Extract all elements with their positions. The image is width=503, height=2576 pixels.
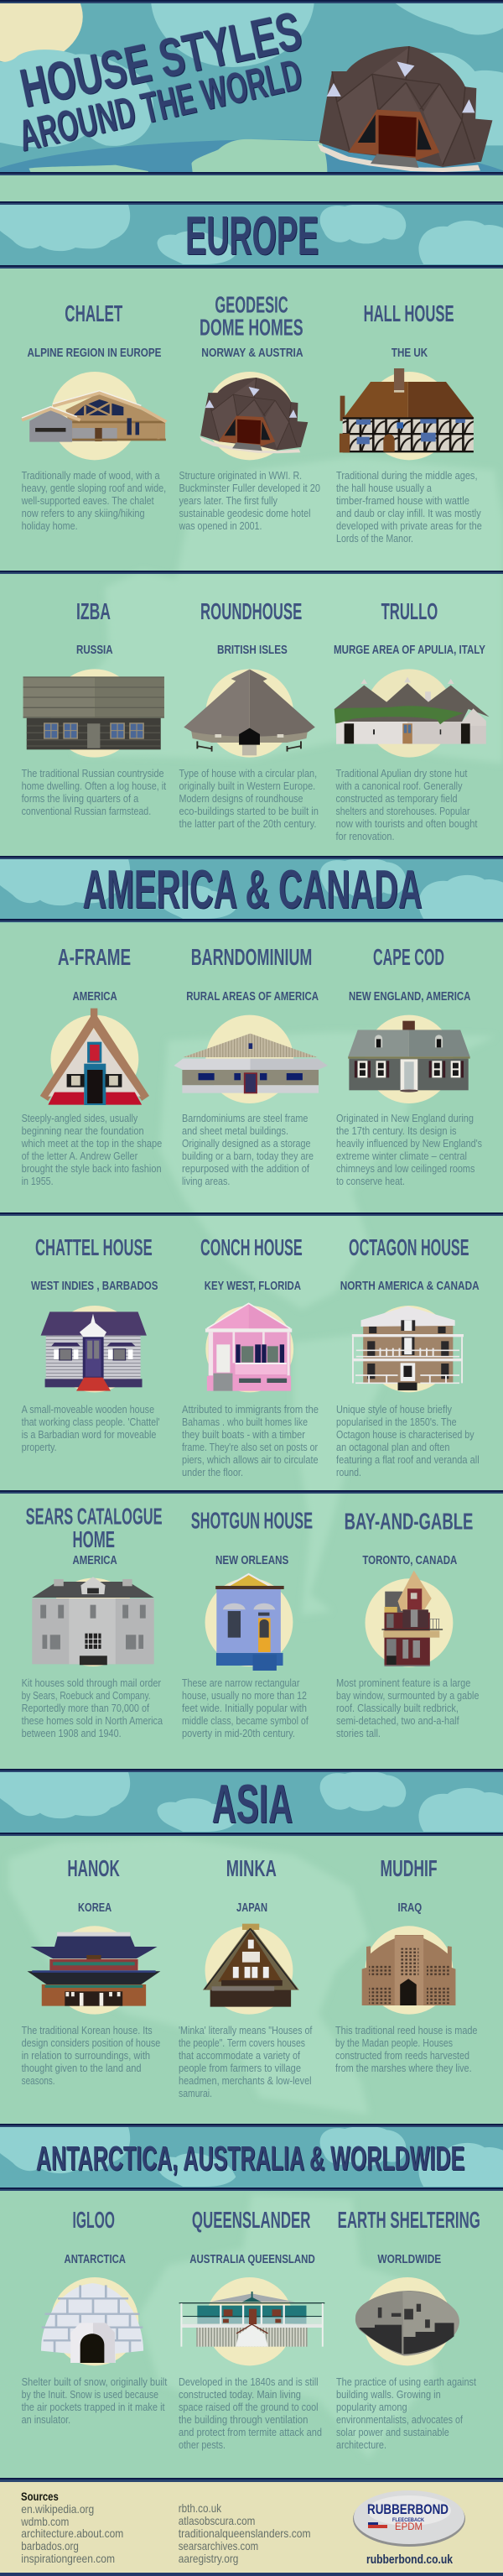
heading: sears catalogue home (26, 1504, 163, 1552)
map: South America (293, 1334, 386, 1615)
description: sears catalogue home (22, 1676, 163, 1739)
description: mudhif: from the marshes where they live. (335, 2062, 472, 2074)
icon: bay-and-gable house (366, 1571, 453, 1667)
description: geodesic dome: was opened in 2001. (179, 519, 262, 532)
panel: octagon house (336, 1234, 480, 1478)
description: earth sheltering: architecture. (336, 2438, 386, 2451)
panel: mudhif (335, 1855, 478, 2074)
description: mudhif (335, 2024, 478, 2074)
heading: queenslander: QUEENSLANDER (192, 2207, 310, 2233)
description: queenslander: and protect from termite attack and (179, 2426, 322, 2438)
panel: bay-and-gable (336, 1509, 479, 1739)
description: trullo (335, 767, 478, 842)
icon: roundhouse (184, 669, 315, 758)
icon: sears catalogue home (32, 1577, 154, 1666)
map: North America (159, 1032, 495, 1309)
description: geodesic dome: Structure originated in WWI. R. (179, 469, 302, 482)
description: igloo: Shelter built of snow, originally built (22, 2375, 168, 2388)
heading: sears catalogue home: SEARS CATALOGUE (26, 1504, 163, 1530)
description: hall house: Traditional during the middle ages, (336, 469, 478, 482)
section band: Asia (0, 1769, 503, 1836)
description: trullo: with a canonical roof. Generally (335, 780, 463, 792)
description: geodesic dome (179, 469, 320, 532)
description: queenslander: Developed in the 1840s and is still (179, 2375, 319, 2388)
description: trullo: Traditional Apulian dry stone hut (335, 767, 468, 780)
description: queenslander: space raised off the ground to cool (179, 2401, 319, 2413)
description: earth sheltering: building walls. Growing in (336, 2388, 441, 2401)
description: hall house (336, 469, 482, 545)
description: barndominium: and sheet metal buildings. (182, 1124, 288, 1137)
panel: a-frame (21, 944, 162, 1187)
description: bay-and-gable (336, 1676, 479, 1739)
description: geodesic dome: sustainable geodesic dome hotel (179, 507, 311, 519)
icon: igloo (41, 2277, 143, 2365)
icon: minka (203, 1924, 299, 2015)
description: igloo: the air pockets trapped in it make it (22, 2401, 165, 2413)
title (14, 0, 306, 161)
panel: cape cod (336, 944, 482, 1187)
description: hanok: design considers position of house (22, 2036, 160, 2049)
description: chattel house (22, 1403, 160, 1453)
description: earth sheltering: The practice of using earth against (336, 2375, 476, 2388)
description: hall house: and daub or clay infill. It was mostly (336, 507, 481, 519)
icon: geodesic dome (200, 372, 308, 460)
heading: chalet: CHALET (65, 300, 122, 326)
description: chattel house: A small-moveable wooden house (22, 1403, 154, 1416)
panel: shotgun house (182, 1508, 313, 1739)
icon: barndominium (174, 1015, 328, 1103)
description: chalet: well-supported eaves. The chalet (21, 494, 154, 507)
description: a-frame: brought the style back into fashion (22, 1162, 162, 1175)
description: mudhif: by the Madan people. Houses (335, 2036, 453, 2049)
description: sears catalogue home: these homes sold in North America (22, 1714, 163, 1727)
heading: geodesic dome homes: DOME HOMES (200, 314, 303, 341)
icon: chalet house (22, 372, 166, 460)
description: minka: the people". Term covers houses (179, 2036, 305, 2049)
location: Key West: KEY WEST, FLORIDA (205, 1280, 301, 1293)
section band: Europe (0, 201, 503, 269)
description: geodesic dome: Buckminster Fuller developed it 20 (179, 482, 320, 494)
description: octagon house: an octagonal plan and often (336, 1441, 449, 1453)
panel: barndominium (174, 944, 328, 1187)
description: chattel house: is a Barbadian word for moveable (22, 1428, 156, 1441)
description: roundhouse (179, 767, 319, 830)
description: hanok: seasons. (22, 2074, 55, 2087)
section band: America and Canada (0, 856, 503, 922)
logo: RubberBond oval badge: EPDM (395, 2521, 423, 2532)
logo: RubberBond oval badge: FLEECEBACK (392, 2518, 425, 2523)
description: minka: people from farmers to village (179, 2062, 301, 2074)
description: barndominium: Originally designed as a storage (182, 1137, 310, 1150)
location: Antarctica: ANTARCTICA (64, 2253, 126, 2266)
description: queenslander: constructed today. Main living (179, 2388, 301, 2401)
description: cape cod (336, 1112, 482, 1187)
description: hall house: Lords of the Manor. (336, 532, 413, 545)
section band: Antarctica, Australia and Worldwide (0, 2124, 503, 2191)
location: New Orleans: NEW ORLEANS (215, 1554, 289, 1567)
panel: hall house (336, 300, 482, 545)
icon: a-frame house (40, 1009, 149, 1105)
panel: chattel house (22, 1234, 160, 1453)
map: Asia (8, 1838, 369, 2115)
description: hanok: thought given to the land and (22, 2062, 142, 2074)
location: Australia Queensland: AUSTRALIA QUEENSLAND (189, 2253, 315, 2266)
description: conch house: Attributed to immigrants from the (182, 1403, 319, 1416)
description: shotgun house: feet wide. Initially popular with (182, 1702, 307, 1714)
hero banner (0, 0, 503, 172)
title line two: AROUND THE WORLD (14, 50, 306, 161)
heading: a-frame: A-FRAME (58, 944, 131, 970)
panel: minka (179, 1855, 313, 2099)
description: trullo: now with tourists and often bought (335, 817, 478, 830)
description: trullo: shelters and storehouses. Popular (335, 805, 470, 817)
panel: queenslander (179, 2207, 324, 2451)
heading: roundhouse: ROUNDHOUSE (200, 598, 302, 624)
panel: roundhouse (179, 598, 319, 830)
description: sears catalogue home: by Sears, Roebuck and Company. (22, 1689, 151, 1702)
description: conch house: they built boats - with a timber (182, 1428, 306, 1441)
description: chattel house: that working class people. 'Chattel' (22, 1416, 160, 1428)
heading: izba: IZBA (76, 598, 111, 624)
icon: conch house (205, 1303, 293, 1392)
heading: mudhif: MUDHIF (381, 1855, 438, 1881)
description: earth sheltering: popularity among (336, 2401, 407, 2413)
heading: igloo: IGLOO (72, 2207, 115, 2233)
sources list: second column: aaregistry.org (179, 2552, 238, 2565)
heading: sears catalogue home: HOME (72, 1526, 115, 1552)
description: shotgun house: These are narrow rectangular (182, 1676, 300, 1689)
description: queenslander (179, 2375, 322, 2451)
heading: geodesic dome homes (200, 292, 303, 341)
description: trullo: constructed as temporary field (335, 792, 458, 805)
panel: chalet (21, 300, 166, 532)
map: Europe (75, 457, 503, 764)
description: cape cod: the 17th century. Its design is (336, 1124, 457, 1137)
location: rural areas of America: RURAL AREAS OF AMERICA (186, 990, 319, 1004)
heading: barndominium: BARNDOMINIUM (191, 944, 312, 970)
map: Australia (138, 2194, 436, 2459)
location: alpine region: ALPINE REGION IN EUROPE (27, 347, 162, 360)
description: izba (22, 767, 167, 817)
description: hall house: timber-framed house with wattle (336, 494, 469, 507)
panel: igloo (22, 2207, 168, 2426)
sources list: second column: rbth.co.uk (179, 2501, 222, 2515)
description: sears catalogue home: Reportedly more than 70,000 of (22, 1702, 149, 1714)
description: octagon house: Unique style of house briefly (336, 1403, 452, 1416)
description: shotgun house: poverty in mid-20th century. (182, 1727, 295, 1739)
sources list: first column: wdmb.com (20, 2515, 69, 2528)
panel: izba (22, 598, 167, 817)
description: minka (179, 2024, 313, 2099)
description: igloo: an insulator. (22, 2413, 70, 2426)
icon: trullo (334, 669, 490, 758)
sources list: first column: inspirationgreen.com (21, 2552, 115, 2565)
panel: earth sheltering (336, 2207, 480, 2451)
description: izba: conventional Russian farmstead. (22, 805, 151, 817)
description: hanok (22, 2024, 160, 2087)
description: hanok: The traditional Korean house. Its (22, 2024, 153, 2036)
location: Japan: JAPAN (236, 1901, 267, 1915)
location: New England: NEW ENGLAND, AMERICA (349, 990, 471, 1004)
panel: geodesic dome homes (179, 292, 320, 532)
sources list: second column: searsarchives.com (179, 2539, 258, 2553)
description: izba: The traditional Russian countryside (22, 767, 164, 780)
description: conch house: frame. They're also set on posts or (182, 1441, 319, 1453)
description: earth sheltering: environmentalists, advocates of (336, 2413, 463, 2426)
description: cape cod: to conserve heat. (336, 1175, 405, 1187)
icon: hall house (340, 368, 474, 460)
description: octagon house (336, 1403, 480, 1478)
description: barndominium: Barndominiums are steel frame (182, 1112, 308, 1124)
description: earth sheltering: solar power and sustainable (336, 2426, 449, 2438)
description: octagon house: Octagon house is characterised by (336, 1428, 474, 1441)
description: hanok: in relation to surroundings, with (22, 2049, 150, 2062)
location: Toronto: TORONTO, CANADA (362, 1554, 458, 1567)
description: conch house: piers, which allows air to circulate (182, 1453, 319, 1466)
sources list: first column: en.wikipedia.org (21, 2502, 94, 2516)
icon: izba log house (23, 669, 164, 758)
description: chattel house: property. (22, 1441, 57, 1453)
description: bay-and-gable: semi-detached, two and-a-half (336, 1714, 459, 1727)
description: chalet: Traditionally made of wood, with a (22, 469, 160, 482)
description: shotgun house (182, 1676, 309, 1739)
icon: hanok (28, 1926, 160, 2015)
description: queenslander: the building through ventilation (179, 2413, 308, 2426)
description: octagon house: popularised in the 1850's. The (336, 1416, 457, 1428)
description: roundhouse: Modern designs of roundhouse (179, 792, 303, 805)
description: sears catalogue home: between 1908 and 1940. (22, 1727, 122, 1739)
heading: Asia: ASIA (212, 1773, 293, 1834)
description: bay-and-gable: stories tall. (336, 1727, 381, 1739)
background: world map silhouettes (8, 457, 503, 2459)
heading: Europe: EUROPE (185, 205, 319, 266)
description: izba: forms the living quarters of a (22, 792, 139, 805)
icon: shotgun house (205, 1574, 293, 1671)
location: Norway and Austria: NORWAY & AUSTRIA (201, 347, 303, 360)
panel: conch house (182, 1234, 319, 1478)
description: shotgun house: middle class, became symbol of (182, 1714, 309, 1727)
description: cape cod: chimneys and low ceilinged rooms (336, 1162, 475, 1175)
heading: trullo: TRULLO (381, 598, 438, 624)
description: a-frame: of the letter A. Andrew Geller (22, 1150, 138, 1162)
logo: RubberBond oval badge (353, 2490, 465, 2547)
panel: trullo (334, 598, 490, 842)
description: minka: that accommodate a variety of (179, 2049, 300, 2062)
heading: conch house: CONCH HOUSE (200, 1234, 303, 1260)
description: barndominium: building or a barn, today they are (182, 1150, 314, 1162)
description: sears catalogue home: Kit houses sold through mail order (22, 1676, 162, 1689)
location: America: AMERICA (72, 1554, 117, 1567)
description: minka: 'Minka' literally means "Houses of (179, 2024, 313, 2036)
description: a-frame: Steeply-angled sides, usually (22, 1112, 138, 1124)
heading: hanok: HANOK (67, 1855, 120, 1881)
icon: octagon house (352, 1306, 464, 1392)
icon: queenslander house (179, 2277, 324, 2365)
description: roundhouse: the latter part of the 20th century. (179, 817, 317, 830)
description: cape cod: Originated in New England during (336, 1112, 474, 1124)
description: octagon house: featuring a flat roof and veranda all (336, 1453, 480, 1466)
description: barndominium: living areas. (182, 1175, 230, 1187)
description: conch house: Bahamas . who built homes like (182, 1416, 308, 1428)
location: America: AMERICA (72, 990, 117, 1004)
location: Iraq: IRAQ (397, 1901, 422, 1915)
icon: cape cod house (348, 1015, 470, 1103)
description: octagon house: round. (336, 1466, 361, 1478)
description: mudhif: This traditional reed house is made (335, 2024, 478, 2036)
heading: geodesic dome homes: GEODESIC (215, 292, 288, 318)
description: chalet: heavy, gentle sloping roof and wide, (22, 482, 166, 494)
footer panel (0, 2478, 503, 2576)
icon: chattel house (41, 1306, 147, 1392)
description: chalet: holiday home. (22, 519, 78, 532)
location: the UK: THE UK (392, 347, 428, 360)
description: a-frame: which meet at the top in the shape (21, 1137, 162, 1150)
panel: sears catalogue home (22, 1504, 163, 1739)
location: British Isles: BRITISH ISLES (217, 644, 288, 657)
heading: cape cod: CAPE COD (373, 944, 444, 970)
sources list: second column: traditionalqueenslanders.com (179, 2526, 310, 2540)
description: a-frame (21, 1112, 162, 1187)
location: Russia: RUSSIA (76, 644, 113, 657)
sources list: first column (20, 2502, 123, 2565)
description: chalet: now refers to any skiing/hiking (22, 507, 145, 519)
heading: shotgun house: SHOTGUN HOUSE (191, 1508, 313, 1534)
description: geodesic dome: years later. The first fully (179, 494, 277, 507)
description: mudhif: constructed from reeds harvested (335, 2049, 469, 2062)
description: trullo: for renovation. (335, 830, 394, 842)
description: bay-and-gable: roof. Classically built redbrick, (336, 1702, 459, 1714)
description: barndominium (182, 1112, 314, 1187)
description: a-frame: in 1955. (22, 1175, 54, 1187)
description: cape cod: extreme winter climate – central (336, 1150, 467, 1162)
description: chalet (21, 469, 166, 532)
icon: geodesic dome house (318, 46, 492, 172)
description: minka: samurai. (179, 2087, 212, 2099)
description: igloo: by the Inuit. Snow is used because (22, 2388, 158, 2401)
description: a-frame: beginning near the foundation (22, 1124, 144, 1137)
heading: chattel house: CHATTEL HOUSE (35, 1234, 153, 1260)
location: Korea: KOREA (78, 1901, 112, 1915)
sources list: second column: atlasobscura.com (179, 2514, 255, 2527)
icon: earth sheltered house (355, 2277, 459, 2365)
location: West Indies: WEST INDIES , BARBADOS (31, 1280, 158, 1293)
panel: hanok (22, 1855, 160, 2087)
website link: rubberbond.co.uk (366, 2553, 454, 2567)
description: roundhouse: originally built in Western Europe. (179, 780, 315, 792)
location: Worldwide: WORLDWIDE (377, 2253, 441, 2266)
description: izba: home dwelling. Often a log house, it (22, 780, 167, 792)
icon: mudhif reed house (362, 1926, 455, 2015)
description: barndominium: repurposed with the addition of (182, 1162, 309, 1175)
description: igloo (22, 2375, 168, 2426)
description: bay-and-gable: Most prominent feature is a large (336, 1676, 470, 1689)
description: roundhouse: Type of house with a circular plan, (179, 767, 317, 780)
heading: minka: MINKA (226, 1855, 277, 1881)
description: shotgun house: house, usually no more than 12 (182, 1689, 307, 1702)
description: conch house (182, 1403, 319, 1478)
logo: RubberBond oval badge: RUBBERBOND (367, 2501, 449, 2517)
sources list: first column: architecture.about.com (21, 2526, 123, 2540)
description: hall house: the hall house usually a (336, 482, 433, 494)
sources list: first column: barbados.org (21, 2539, 79, 2553)
description: roundhouse: eco-buildings started to be built in (179, 805, 319, 817)
description: queenslander: other pests. (179, 2438, 226, 2451)
sources list: second column (179, 2501, 310, 2565)
description: earth sheltering (336, 2375, 476, 2451)
description: minka: headmen, merchants & low-level (179, 2074, 312, 2087)
sources heading: Sources (21, 2490, 59, 2503)
hero sky, sun, clouds and hills (0, 0, 503, 172)
description: conch house: under the floor. (182, 1466, 243, 1478)
